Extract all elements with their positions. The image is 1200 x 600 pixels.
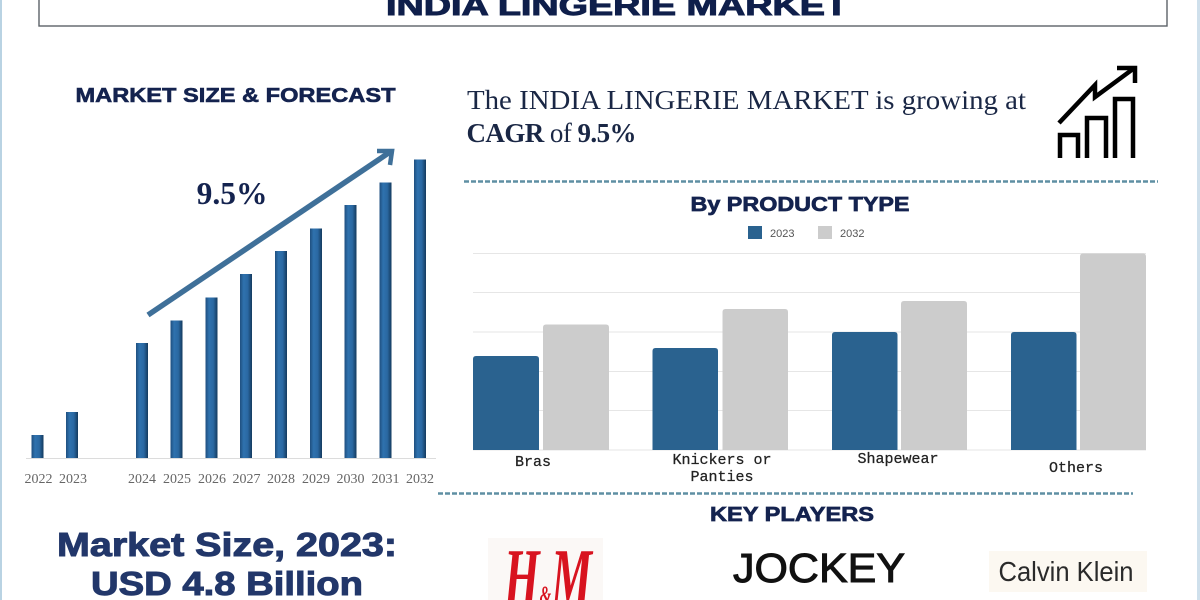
logo: Calvin Klein: Calvin Klein — [998, 556, 1134, 587]
bar chart: by product type: Knickers or — [672, 452, 772, 469]
bar chart: market size forecast: 2026 — [198, 472, 226, 487]
CAGR statement — [466, 85, 1027, 148]
heading: market size and forecast: MARKET SIZE & FORECAST — [76, 85, 396, 107]
bar chart: market size forecast: 2029 — [302, 472, 330, 487]
bar chart: market size forecast: 2022 — [24, 472, 52, 487]
bar chart: market size forecast: 2025 — [163, 472, 191, 487]
divider: bottom — [438, 492, 1133, 495]
heading: by product type: By PRODUCT TYPE — [690, 194, 910, 216]
icon: growth chart — [1059, 68, 1135, 158]
legend: 2023 — [770, 228, 794, 240]
bar chart: market size forecast — [24, 160, 436, 487]
bar chart: market size forecast: 2032 — [406, 472, 434, 487]
bar chart: by product type — [473, 254, 1146, 486]
market size callout: Market Size, 2023: — [57, 526, 397, 563]
label: growth rate: 9.5% — [197, 176, 267, 211]
CAGR statement: CAGR of 9.5% — [466, 118, 636, 148]
bar chart: market size forecast: 2031 — [372, 472, 400, 487]
divider: top — [464, 180, 1158, 183]
bar chart: market size forecast: 2023 — [59, 472, 87, 487]
bar chart: market size forecast: 2028 — [267, 472, 295, 487]
CAGR statement: The INDIA LINGERIE MARKET is growing at — [467, 85, 1027, 115]
bar chart: by product type: Panties — [690, 469, 754, 486]
bar chart: by product type: Others — [1049, 460, 1103, 477]
bar chart: by product type: Bras — [515, 454, 551, 471]
legend — [748, 226, 864, 240]
title banner — [39, 0, 1167, 26]
market size callout — [57, 526, 397, 600]
heading: key players: KEY PLAYERS — [710, 504, 874, 526]
bar chart: market size forecast: 2024 — [128, 472, 156, 487]
bar chart: market size forecast: 2030 — [336, 472, 364, 487]
logo: Jockey: JOCKEY — [733, 545, 905, 591]
legend: 2032 — [840, 228, 864, 240]
arrow: growth trend — [148, 151, 392, 315]
bar chart: by product type: Shapewear — [857, 451, 939, 468]
bar chart: market size forecast: 2027 — [232, 472, 260, 487]
